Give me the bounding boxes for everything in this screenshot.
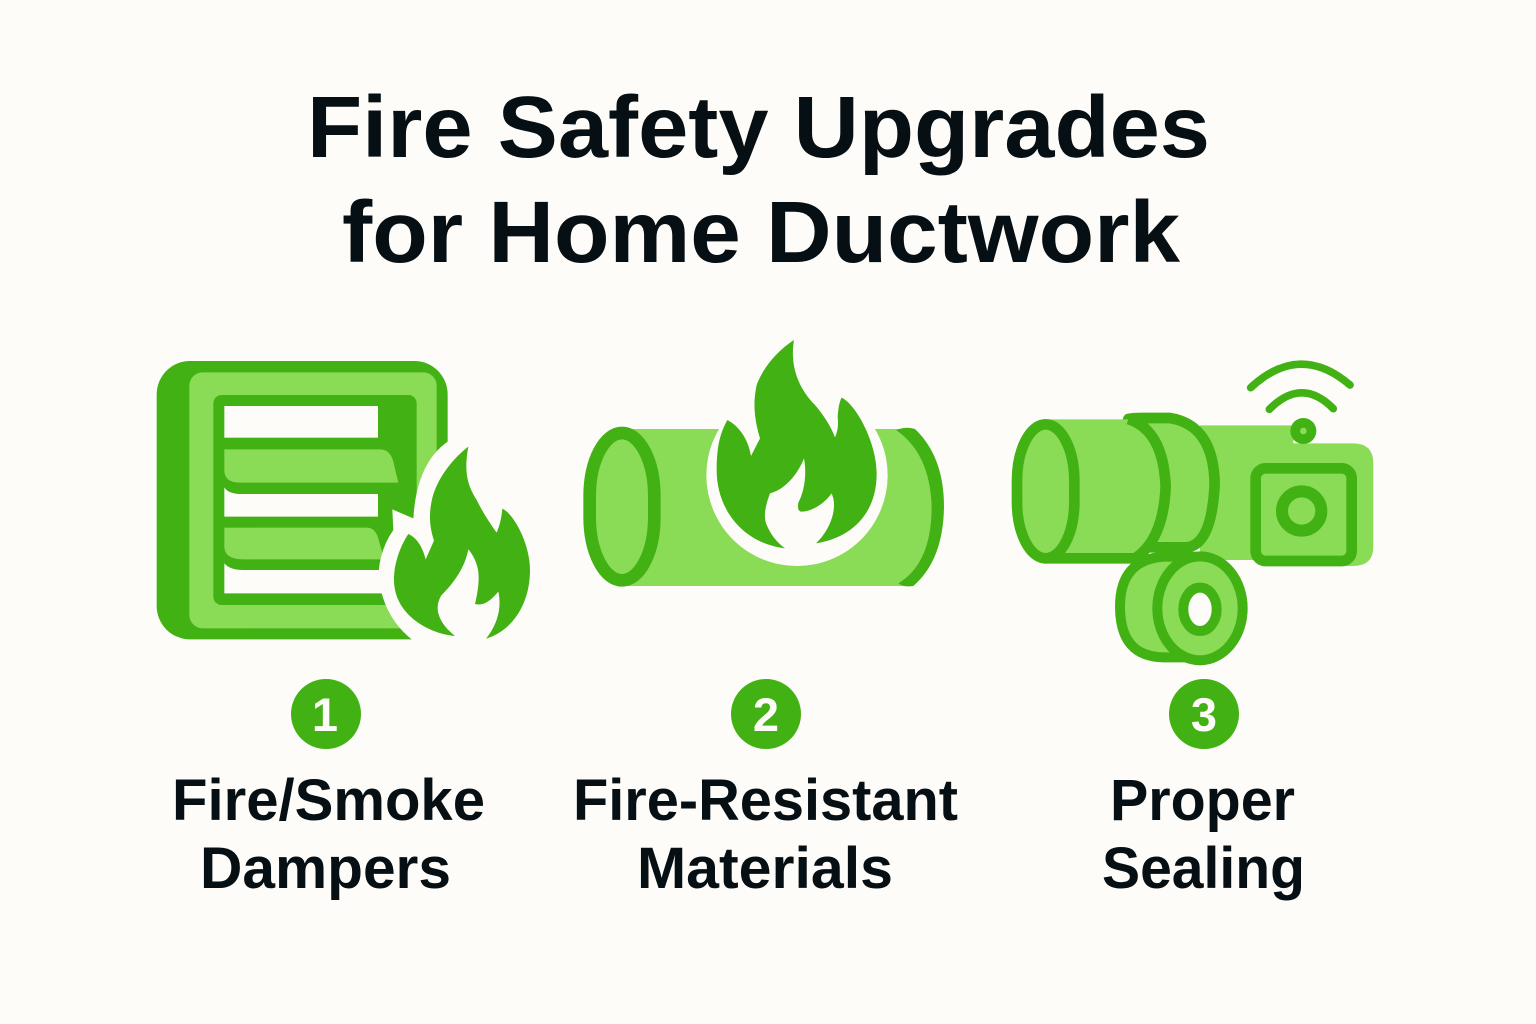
number badge 2: 2 (753, 688, 779, 741)
tape roll (1120, 556, 1243, 660)
panel: fire/smoke dampers (157, 361, 540, 901)
label: proper sealing: Proper (1110, 768, 1295, 833)
icon: damper with flame (157, 361, 540, 650)
number badge 3: 3 (1191, 688, 1217, 741)
label: fire-resistant materials: Fire-Resistant (573, 768, 958, 833)
duct collar (1128, 418, 1215, 547)
sensor lens (1256, 468, 1352, 561)
title: Fire Safety Upgrades (307, 79, 1210, 176)
number badge 3 (1169, 679, 1239, 749)
title: for Home Ductwork (342, 184, 1181, 281)
number badge 1: 1 (312, 688, 338, 741)
title (307, 79, 1210, 281)
label: fire/smoke dampers (172, 768, 485, 901)
label: fire-resistant materials (573, 768, 958, 901)
sensor body (1200, 425, 1373, 566)
panel: fire-resistant materials (573, 340, 958, 901)
label: proper sealing (1102, 768, 1305, 901)
label: fire/smoke dampers: Fire/Smoke (172, 768, 485, 833)
panel: proper sealing (1017, 364, 1373, 901)
wifi signal arcs (1251, 364, 1350, 409)
label: fire-resistant materials: Materials (637, 836, 893, 901)
icon: sealed duct, sensor and tape roll (1017, 364, 1373, 660)
label: proper sealing: Sealing (1102, 836, 1305, 901)
number badge 1 (291, 679, 361, 749)
icon: duct with flame (590, 340, 944, 586)
duct body (1046, 419, 1166, 558)
number badge 2 (731, 679, 801, 749)
label: fire/smoke dampers: Dampers (200, 836, 451, 901)
sensor dot (1290, 418, 1316, 444)
